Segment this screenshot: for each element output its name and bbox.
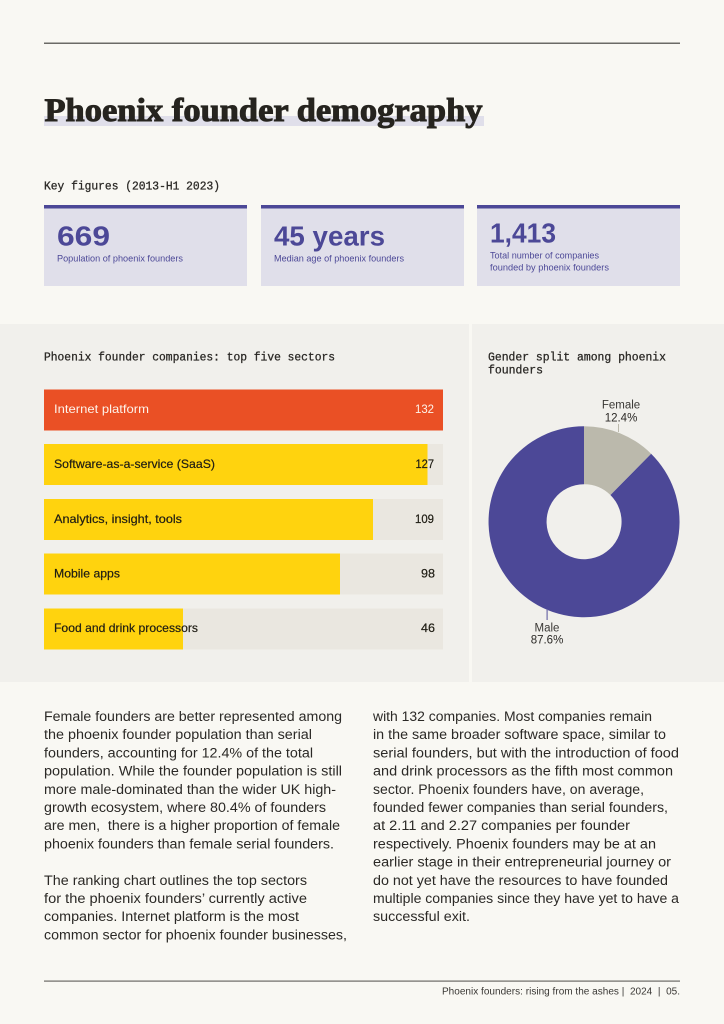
text block: left column: population. While the founder population is still (44, 764, 342, 779)
heading: sectors chart: Phoenix founder companies: top five sectors (44, 350, 335, 364)
card: median age (261, 205, 464, 286)
title: Phoenix founder demography (44, 93, 483, 129)
text block: left column: are men, there is a higher proportion of female (44, 818, 340, 833)
text block: right column: earlier stage in their entrepreneurial journey or (373, 855, 672, 870)
text block: right column: multiple companies since they have yet to have a (373, 891, 680, 906)
heading: gender split (488, 350, 666, 378)
label: female (602, 400, 640, 432)
text block: left column: more male-dominated than the wider UK high- (44, 782, 336, 797)
text block: right column: and drink processors as the fifth most common (373, 764, 673, 779)
donut chart (489, 426, 680, 617)
text block: right column: respectively. Phoenix founders may be at an (373, 836, 656, 851)
text block: left column: common sector for phoenix founder businesses, (44, 927, 347, 942)
label: male: Male (535, 622, 559, 634)
label: male (531, 609, 563, 646)
text block: right column (372, 709, 680, 924)
footer: Phoenix founders: rising from the ashes | 2024 | 05. (442, 986, 680, 998)
label: female: Female (602, 400, 640, 412)
text block: right column: founded fewer companies than serial founders, (373, 800, 668, 815)
text block: left column: phoenix founders than female serial founders. (44, 836, 334, 851)
text block: left column: for the phoenix founders’ currently active (44, 891, 307, 906)
heading: key figures: Key figures (2013-H1 2023) (44, 180, 220, 194)
text block: left column: founders, accounting for 12.4% of the total (44, 745, 313, 760)
text block: left column: growth ecosystem, where 80.4% of founders (44, 800, 326, 815)
label: male: 87.6% (531, 634, 563, 646)
panel: key figure cards (44, 205, 680, 286)
bar: food and drink: Food and drink processors (54, 621, 198, 635)
card: total companies: Total number of companies (490, 250, 599, 260)
card: population: 669 (57, 220, 110, 252)
bar: food and drink: 46 (421, 621, 435, 635)
bar: SaaS (44, 444, 443, 485)
bar: analytics (44, 499, 443, 540)
slice: male (489, 426, 680, 617)
bar: internet platform: 132 (415, 402, 434, 416)
bar: mobile apps: Mobile apps (54, 566, 120, 580)
card: total companies (477, 205, 680, 286)
text block: right column: successful exit. (373, 909, 470, 924)
heading: gender split: Gender split among phoenix (488, 350, 666, 364)
card: total companies: 1,413 (490, 218, 556, 248)
card: median age: 45 years (274, 220, 385, 252)
slice: female (584, 426, 651, 495)
text block: right column: in the same broader software space, similar to (373, 727, 666, 742)
text block: left column: Female founders are better represented among (44, 709, 342, 724)
text block: right column: at 2.11 and 2.27 companies per founder (373, 818, 631, 833)
bar: food and drink (44, 608, 443, 650)
card: median age: Median age of phoenix founders (274, 254, 405, 264)
bar: SaaS: Software-as-a-service (SaaS) (54, 457, 215, 471)
card: total companies: founded by phoenix founders (490, 262, 610, 272)
bar: analytics: Analytics, insight, tools (54, 512, 182, 526)
text block: left column: the phoenix founder population than serial (44, 727, 312, 742)
card: population (44, 205, 247, 286)
text block: left column (44, 709, 347, 942)
bar: mobile apps: 98 (421, 566, 435, 580)
bar: internet platform: Internet platform (54, 402, 149, 416)
text block: right column: serial founders, but with the introduction of food (373, 745, 679, 760)
bar: mobile apps (44, 554, 443, 594)
bar: analytics: 109 (415, 512, 434, 526)
bar: SaaS: 127 (416, 457, 434, 471)
text block: right column: with 132 companies. Most companies remain (372, 709, 652, 724)
text block: right column: do not yet have the resources to have founded (373, 873, 668, 888)
text block: right column: sector. Phoenix founders have, on average, (373, 782, 644, 797)
card: population: Population of phoenix founders (57, 254, 184, 264)
bar chart (44, 390, 443, 650)
panel: top five sectors (0, 324, 469, 682)
panel: gender split (472, 324, 724, 682)
text block: left column: companies. Internet platform is the most (44, 909, 299, 924)
label: female: 12.4% (605, 412, 637, 424)
text block: left column: The ranking chart outlines the top sectors (44, 873, 307, 888)
heading: gender split: founders (488, 364, 543, 378)
bar: internet platform (44, 390, 443, 430)
